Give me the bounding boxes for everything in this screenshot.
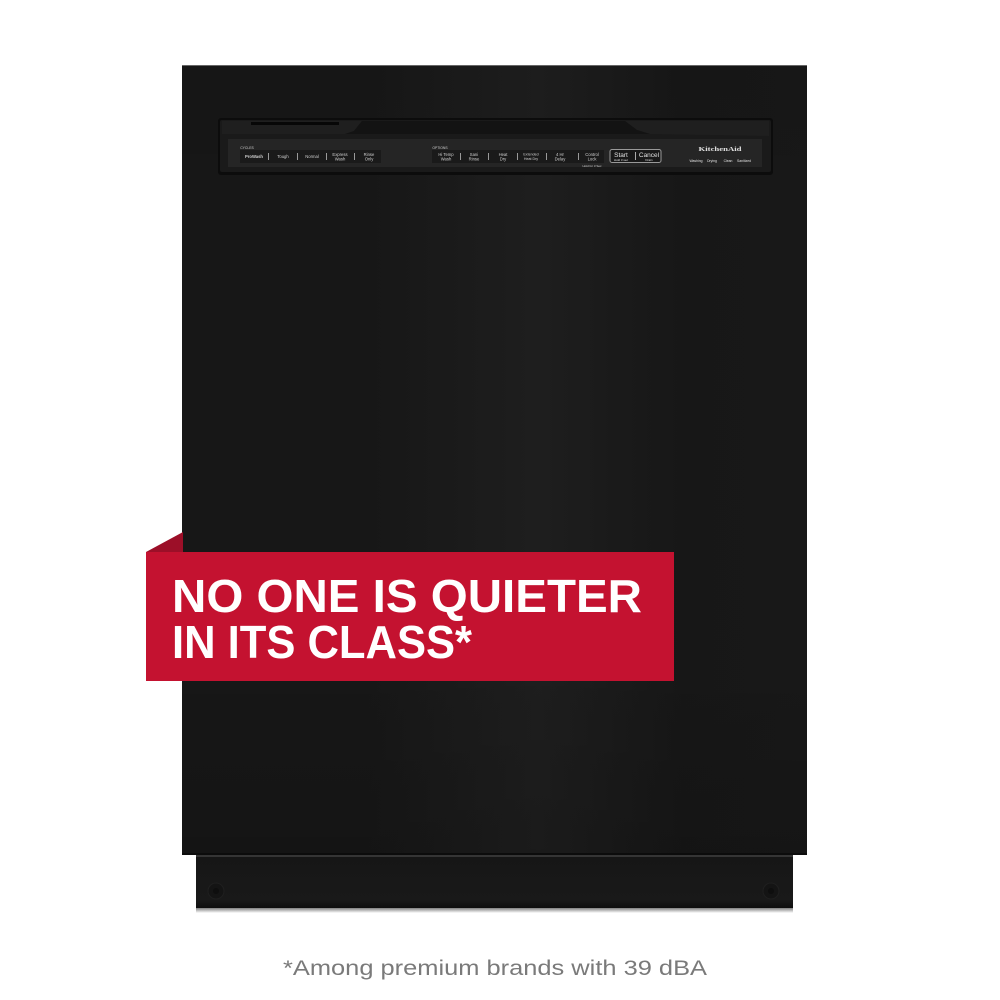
start and cancel buttons: Hold 3 sec bbox=[614, 158, 629, 162]
options group bbox=[432, 146, 604, 168]
footnote: *Among premium brands with 39 dBA bbox=[283, 957, 707, 980]
control panel bbox=[218, 118, 773, 175]
KitchenAid logo and status: Washing bbox=[689, 159, 703, 163]
KitchenAid logo and status: KitchenAid bbox=[698, 146, 742, 153]
start and cancel buttons: Cancel bbox=[639, 152, 660, 159]
options group: Rinse bbox=[469, 156, 480, 162]
options group: Hi Temp bbox=[438, 152, 454, 157]
options group: Extended bbox=[523, 152, 539, 156]
dishwasher bbox=[182, 65, 807, 913]
cycles group: Tough bbox=[277, 154, 289, 159]
door panel bbox=[182, 65, 807, 855]
cycles group: Wash bbox=[335, 156, 346, 162]
vent slots bbox=[251, 122, 339, 125]
cycles group: Express bbox=[332, 152, 348, 157]
handle recess bbox=[222, 121, 769, 136]
options group: Lock bbox=[588, 156, 597, 162]
start and cancel buttons bbox=[610, 150, 661, 162]
cycles group: Only bbox=[365, 156, 374, 162]
options group: Control bbox=[585, 152, 599, 157]
start and cancel buttons: Drain bbox=[645, 158, 653, 162]
banner headline bbox=[172, 570, 642, 668]
options group: Heat Dry bbox=[524, 157, 538, 161]
KitchenAid logo and status bbox=[689, 146, 751, 163]
options group: Wash bbox=[441, 156, 452, 162]
toe kick panel bbox=[196, 855, 793, 908]
options group: 4 Hr bbox=[556, 152, 565, 157]
red banner bbox=[146, 532, 674, 681]
start and cancel buttons: Start bbox=[614, 152, 628, 159]
cycles group: Rinse bbox=[364, 152, 375, 157]
KitchenAid logo and status: Clean bbox=[724, 159, 733, 163]
left toe screw bbox=[208, 883, 224, 899]
floor shadow bbox=[196, 907, 793, 913]
banner headline: NO ONE IS QUIETER bbox=[172, 570, 642, 622]
options group: OPTIONS bbox=[432, 146, 448, 150]
options group: Dry bbox=[500, 156, 507, 162]
cycles group bbox=[240, 146, 381, 163]
options group: Hold for 3 Sec bbox=[582, 164, 602, 168]
banner fold bbox=[146, 532, 183, 552]
banner headline: IN ITS CLASS* bbox=[172, 616, 472, 668]
KitchenAid logo and status: Drying bbox=[707, 159, 717, 163]
options group: Delay bbox=[555, 156, 566, 162]
options group: Sani bbox=[470, 152, 478, 157]
right toe screw bbox=[763, 883, 779, 899]
cycles group: ProWash bbox=[245, 154, 263, 159]
banner body bbox=[146, 552, 674, 681]
KitchenAid logo and status: Sanitized bbox=[737, 159, 751, 163]
cycles group: CYCLES bbox=[240, 146, 255, 150]
options group: Heat bbox=[499, 152, 508, 157]
fascia bbox=[228, 139, 762, 167]
cycles group: Normal bbox=[305, 154, 319, 159]
